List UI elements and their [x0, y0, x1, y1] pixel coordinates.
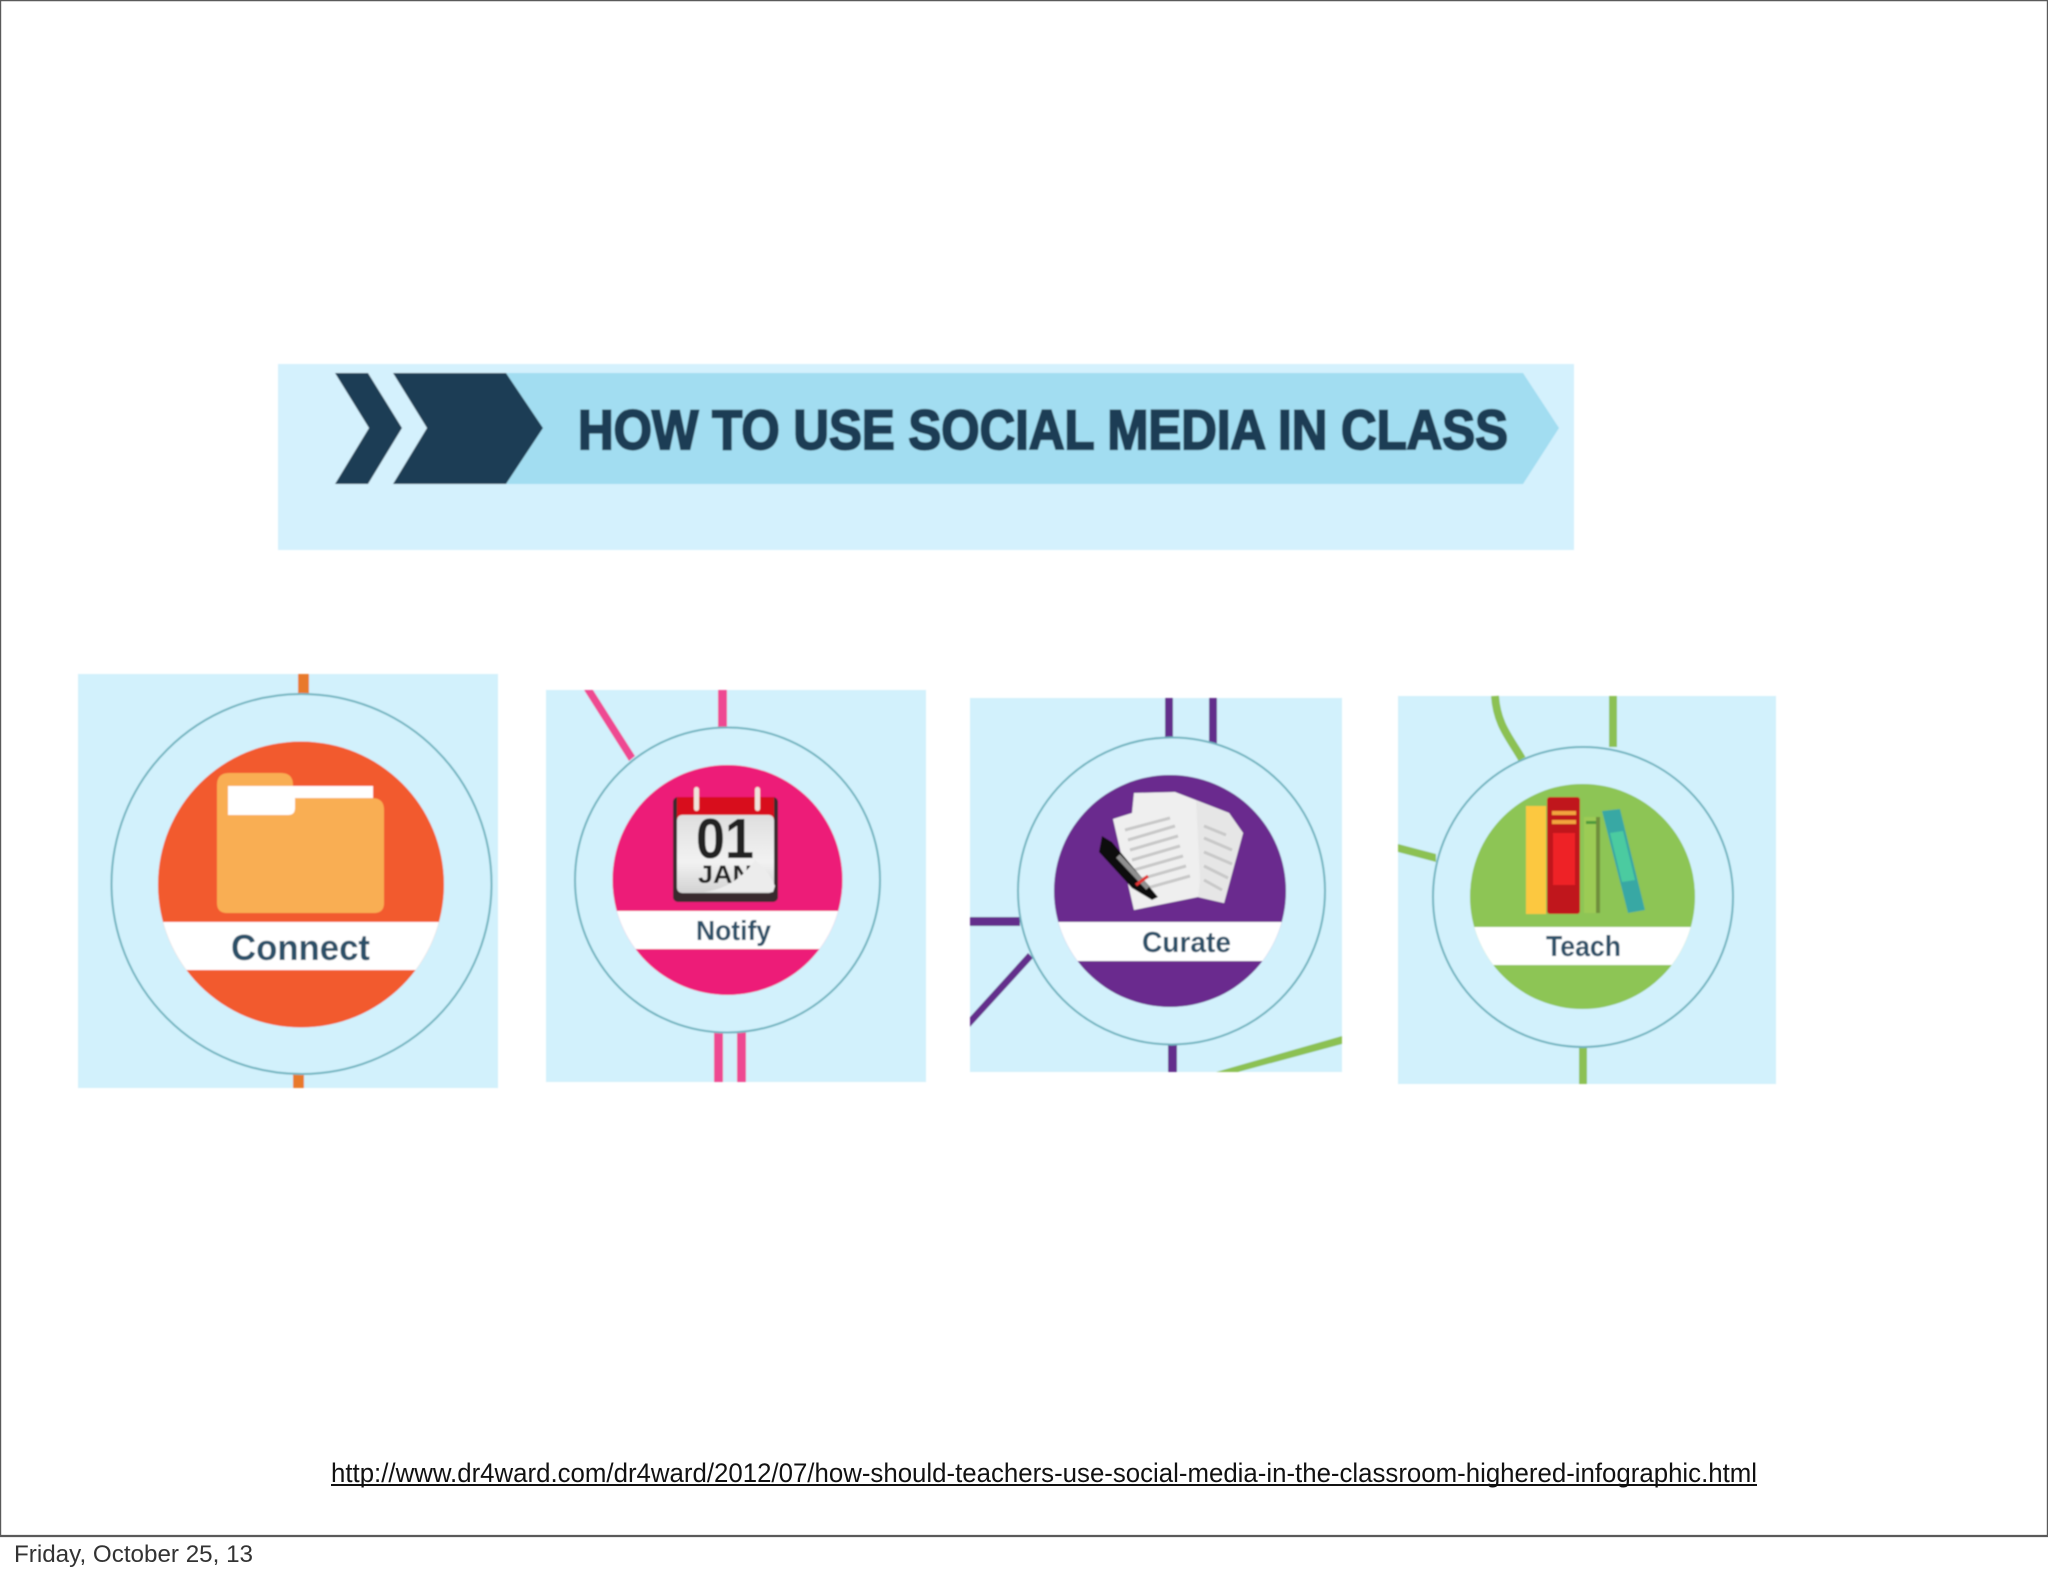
connector lines — [970, 698, 1342, 1072]
purple disc — [1054, 775, 1286, 1007]
label: connect: Connect — [231, 927, 370, 968]
icon: papers and pen — [1099, 792, 1243, 910]
label band — [605, 911, 850, 949]
connector lines — [584, 690, 746, 1082]
heading: HOW TO USE SOCIAL MEDIA IN CLASS — [578, 398, 1508, 461]
outer ring — [112, 694, 492, 1074]
connector lines — [293, 674, 309, 1088]
label band — [150, 922, 460, 970]
pink disc — [612, 765, 842, 995]
panel: banner — [278, 364, 1574, 550]
outer ring — [1018, 738, 1325, 1044]
green disc — [1470, 784, 1695, 1009]
outer ring — [1433, 747, 1733, 1047]
icon: books — [1526, 797, 1645, 914]
month: JAN — [698, 861, 752, 889]
icon: small chevron — [335, 373, 402, 484]
banner arrow — [506, 373, 1559, 484]
icon: large chevron — [393, 373, 543, 484]
label: notify: Notify — [696, 915, 771, 946]
page curl — [704, 860, 775, 892]
panel: teach — [1398, 696, 1776, 1084]
label: teach: Teach — [1546, 931, 1621, 963]
panel: curate — [970, 698, 1342, 1072]
outer ring — [575, 728, 880, 1032]
label: curate: Curate — [1142, 927, 1231, 959]
panel: connect — [78, 674, 498, 1088]
date number: 01 — [696, 807, 754, 871]
orange disc — [158, 742, 444, 1028]
date footer: Friday, October 25, 13 — [14, 1541, 253, 1568]
icon: calendar — [673, 787, 778, 902]
source url: http://www.dr4ward.com/dr4ward/2012/07/how-should-teachers-use-social-media-in-the-classroom-highered-infographic.html — [331, 1458, 1757, 1488]
icon: folder — [217, 773, 384, 913]
label band — [1465, 927, 1700, 965]
panel: notify — [546, 690, 926, 1082]
label band — [1050, 922, 1290, 961]
connector lines — [1398, 696, 1617, 1084]
